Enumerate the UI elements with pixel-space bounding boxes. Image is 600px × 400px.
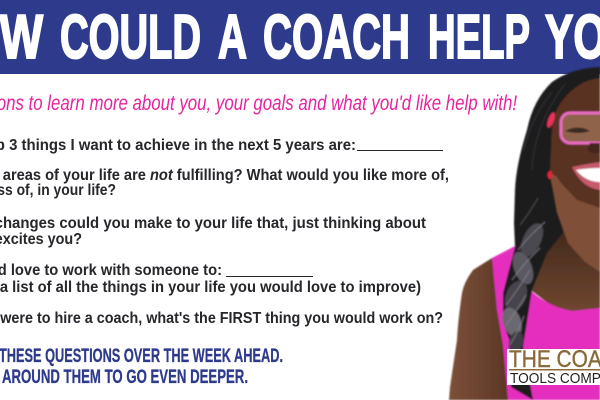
blue closing note <box>0 346 283 388</box>
title banner: A <box>218 3 247 72</box>
red nail <box>548 171 552 179</box>
question list <box>0 137 449 327</box>
arm <box>449 258 515 400</box>
blue closing note: AROUND THEM TO GO EVEN DEEPER. <box>2 367 248 388</box>
gray braid <box>499 220 548 354</box>
blue closing note: THESE QUESTIONS OVER THE WEEK AHEAD. <box>0 346 283 367</box>
tank top <box>492 246 600 400</box>
lens <box>561 113 600 143</box>
glasses temple <box>545 111 557 129</box>
logo: The Coaching Tools Company <box>507 346 600 387</box>
braid strands <box>506 84 565 345</box>
title banner: HELP <box>428 3 530 72</box>
smile <box>572 162 600 190</box>
face <box>550 78 600 215</box>
title banner: COACH <box>263 3 410 72</box>
chest <box>528 215 600 312</box>
nose shadow <box>587 143 600 154</box>
hand <box>550 175 600 272</box>
title banner: COULD <box>60 3 201 72</box>
photo: smiling woman with pink glasses <box>449 67 600 400</box>
eye <box>565 128 590 133</box>
hair <box>503 67 600 400</box>
teeth <box>576 168 600 182</box>
title banner <box>0 0 600 74</box>
